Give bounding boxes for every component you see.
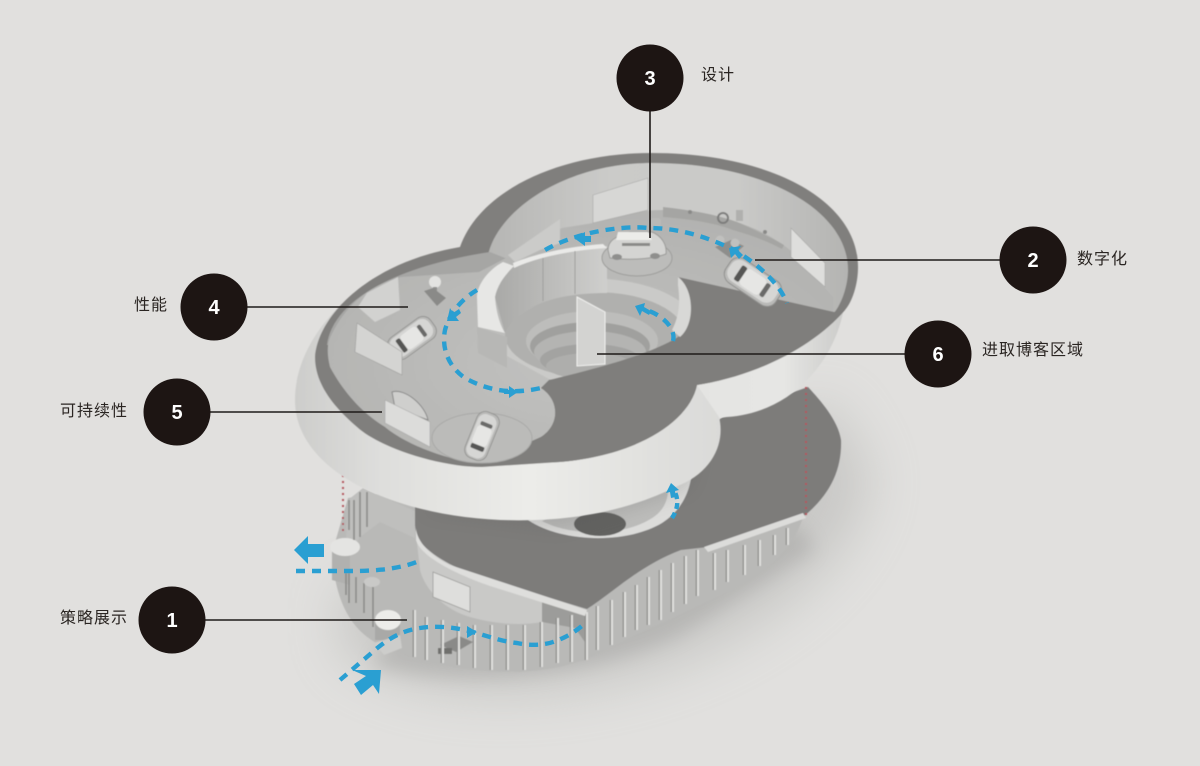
route: upper hall: [545, 227, 787, 303]
slab edge light: [416, 528, 587, 616]
cut wall edge: [672, 277, 691, 337]
wall panel: [433, 572, 470, 612]
display panel performance: [355, 323, 402, 375]
callout 5: 5: [171, 402, 183, 424]
side fins back: [346, 492, 373, 627]
upper lobe outer wall: [690, 300, 845, 420]
arrowhead route: [467, 626, 477, 638]
callout 2: 数字化: [1077, 250, 1128, 268]
display panel back: [593, 178, 648, 223]
car: performance: [384, 313, 440, 363]
callout 1: 策略展示: [60, 609, 128, 627]
standing panel in atrium: [577, 297, 605, 366]
callout 5: 可持续性: [60, 402, 128, 420]
display box performance: [358, 277, 400, 322]
column left: [330, 538, 360, 585]
upper lobe wall: [480, 163, 848, 313]
ground shadow: [340, 400, 870, 695]
callout 1: [60, 586, 407, 654]
arrowhead left hall: [447, 308, 461, 321]
callout 3: 设计: [701, 66, 735, 84]
round tables: [715, 236, 744, 258]
arrowhead upper left: [574, 232, 591, 246]
core cap left: [477, 262, 514, 333]
sustainability exhibit: [392, 391, 428, 420]
arrowhead atrium: [635, 303, 651, 316]
visitor route ground: [294, 536, 583, 695]
support line right: [805, 387, 807, 516]
visitor route upper: [444, 227, 787, 518]
callout 4: 性能: [134, 296, 168, 314]
ground floor slab: [415, 387, 841, 609]
route: lower opening: [672, 488, 677, 518]
route: left hall: [444, 290, 541, 391]
callout 2: [755, 226, 1128, 294]
callout 4: 4: [208, 297, 220, 319]
car: design: [608, 232, 666, 260]
lower floor: strategy display: [330, 387, 841, 672]
lower lobe outer band: [295, 247, 721, 520]
core outer face: [477, 327, 507, 368]
slab lip: [704, 513, 806, 552]
atrium ledge: [505, 279, 690, 385]
base floor: [340, 522, 590, 672]
route: entrance: [340, 625, 583, 680]
display panel sustainability: [385, 400, 430, 447]
support line left: [342, 475, 344, 535]
upper floor model: [295, 153, 858, 520]
arrowhead upper right: [729, 246, 743, 259]
digital display counter: [650, 207, 784, 249]
car: digital: [720, 253, 786, 311]
display panel right: [791, 228, 825, 287]
callout 2: 2: [1027, 250, 1039, 272]
lounge stool: [364, 577, 380, 587]
callout 6: 进取博客区域: [982, 341, 1084, 359]
column front: [374, 610, 402, 655]
callout 5: [60, 378, 382, 446]
turntable sustainability: [432, 413, 532, 463]
pedestal lamp: [424, 276, 446, 306]
shadow from upper floor: [420, 450, 700, 530]
dark service gap: [542, 602, 587, 645]
central core wall: [415, 520, 542, 624]
arrowhead lower opening: [666, 483, 679, 498]
arrowhead bottom: [504, 386, 518, 398]
central atrium pit: [505, 279, 690, 385]
callout 1: 1: [166, 610, 178, 632]
cut-away grey plane: [482, 277, 845, 465]
display panel back left: [508, 219, 560, 262]
car: sustainability: [462, 409, 502, 463]
back walls: [345, 488, 417, 560]
callout 6: 6: [932, 344, 944, 366]
core cap top: [513, 244, 607, 268]
turntable design: [602, 240, 672, 276]
meeting table: [438, 636, 473, 654]
front fins: [414, 528, 788, 670]
floor: [328, 210, 833, 463]
curved core wall: [477, 244, 607, 368]
callout 6: [597, 320, 1084, 388]
upper floor opening: [528, 465, 692, 538]
lower lobe wall: [327, 252, 515, 345]
arrow: exit: [294, 536, 324, 564]
grey rim: [315, 153, 858, 467]
core inner face: [495, 246, 607, 333]
callout 3: [616, 44, 735, 238]
arrow: entrance: [352, 670, 381, 695]
callout 4: [134, 274, 408, 340]
callout 3: 3: [644, 68, 656, 90]
route: exit: [296, 561, 419, 571]
glazed base: [332, 480, 803, 672]
route: atrium: [643, 309, 673, 341]
